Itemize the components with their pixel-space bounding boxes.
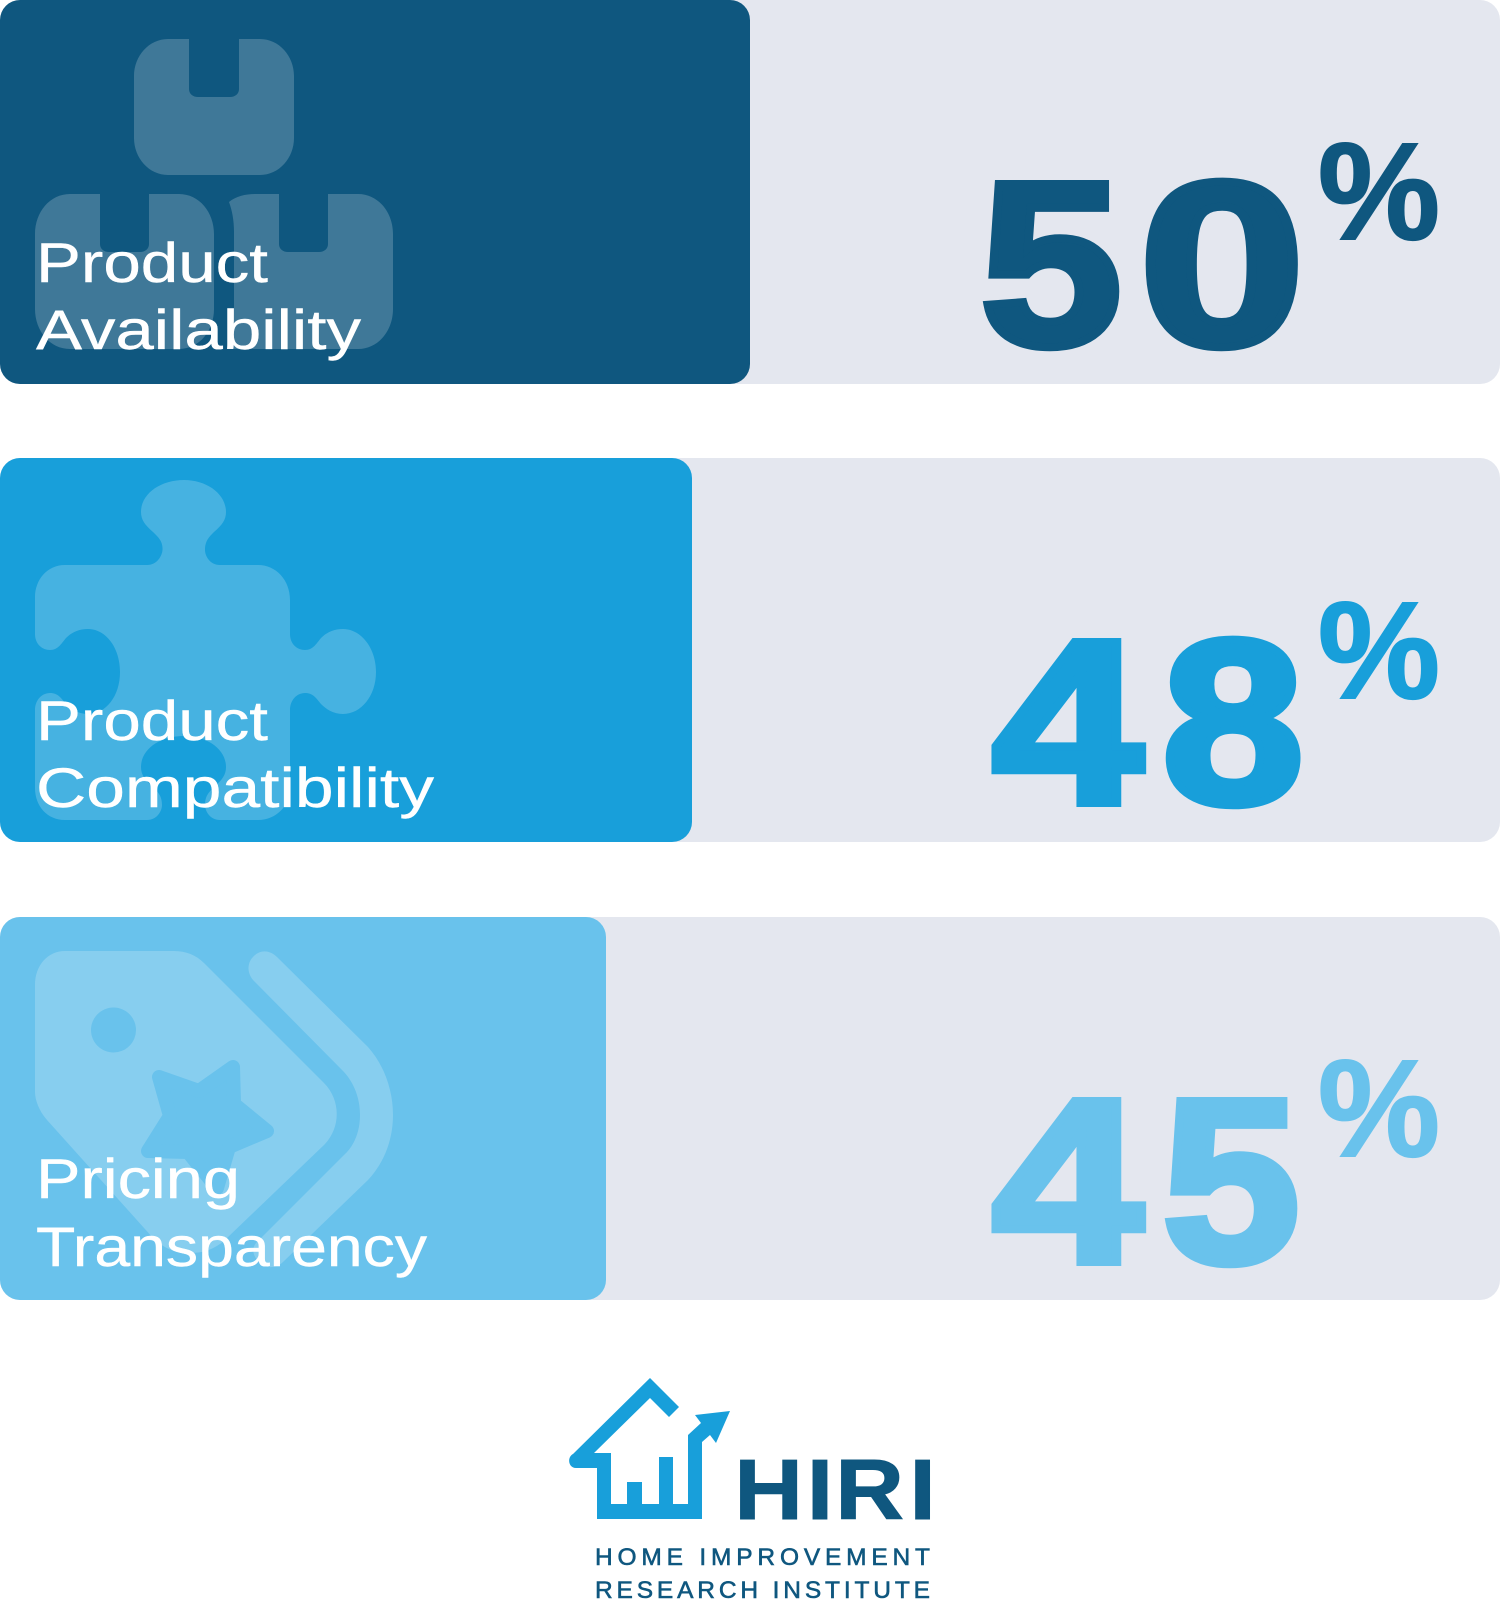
- panel: product availability: [0, 0, 1500, 395]
- value: 48 percent: 8: [1162, 591, 1304, 853]
- value: 45 percent: [992, 1032, 1440, 1312]
- bar: [0, 0, 750, 384]
- label: pricing transparency: Pricing: [36, 1147, 240, 1210]
- label: product availability: Availability: [36, 298, 361, 361]
- label: pricing transparency: Transparency: [36, 1215, 427, 1278]
- value: 50 percent: [980, 115, 1440, 395]
- value: 50 percent: 0: [1139, 133, 1305, 395]
- bar: [0, 458, 692, 842]
- label: product availability: [36, 231, 361, 361]
- tagline: [595, 1544, 930, 1599]
- label: product compatibility: Compatibility: [36, 756, 434, 819]
- value: 50 percent: %: [1318, 115, 1440, 269]
- wordmark: HIRI: [734, 1443, 936, 1538]
- label: product compatibility: [36, 689, 434, 819]
- label: product compatibility: Product: [36, 689, 269, 752]
- icon: puzzle piece: [35, 480, 376, 820]
- logo: HIRI: [569, 1378, 936, 1599]
- label: product availability: Product: [36, 231, 269, 294]
- icon: price tag: [35, 951, 393, 1267]
- track: [0, 0, 1500, 384]
- icon: house with rising arrow: [569, 1378, 730, 1519]
- track: [0, 917, 1500, 1300]
- value: 50 percent: 5: [980, 133, 1122, 395]
- value: 45 percent: 5: [1162, 1050, 1300, 1312]
- tagline: HOME IMPROVEMENT: [595, 1544, 930, 1571]
- label: pricing transparency: [36, 1147, 427, 1278]
- bar: [0, 917, 606, 1300]
- track: [0, 458, 1500, 842]
- value: 45 percent: %: [1318, 1032, 1440, 1186]
- value: 45 percent: 4: [992, 1050, 1143, 1312]
- value: 48 percent: [992, 574, 1440, 853]
- icon: stacked boxes: [35, 39, 393, 349]
- panel: pricing transparency: [0, 917, 1500, 1312]
- value: 48 percent: 4: [992, 591, 1143, 853]
- value: 48 percent: %: [1318, 574, 1440, 728]
- panel: product compatibility: [0, 458, 1500, 853]
